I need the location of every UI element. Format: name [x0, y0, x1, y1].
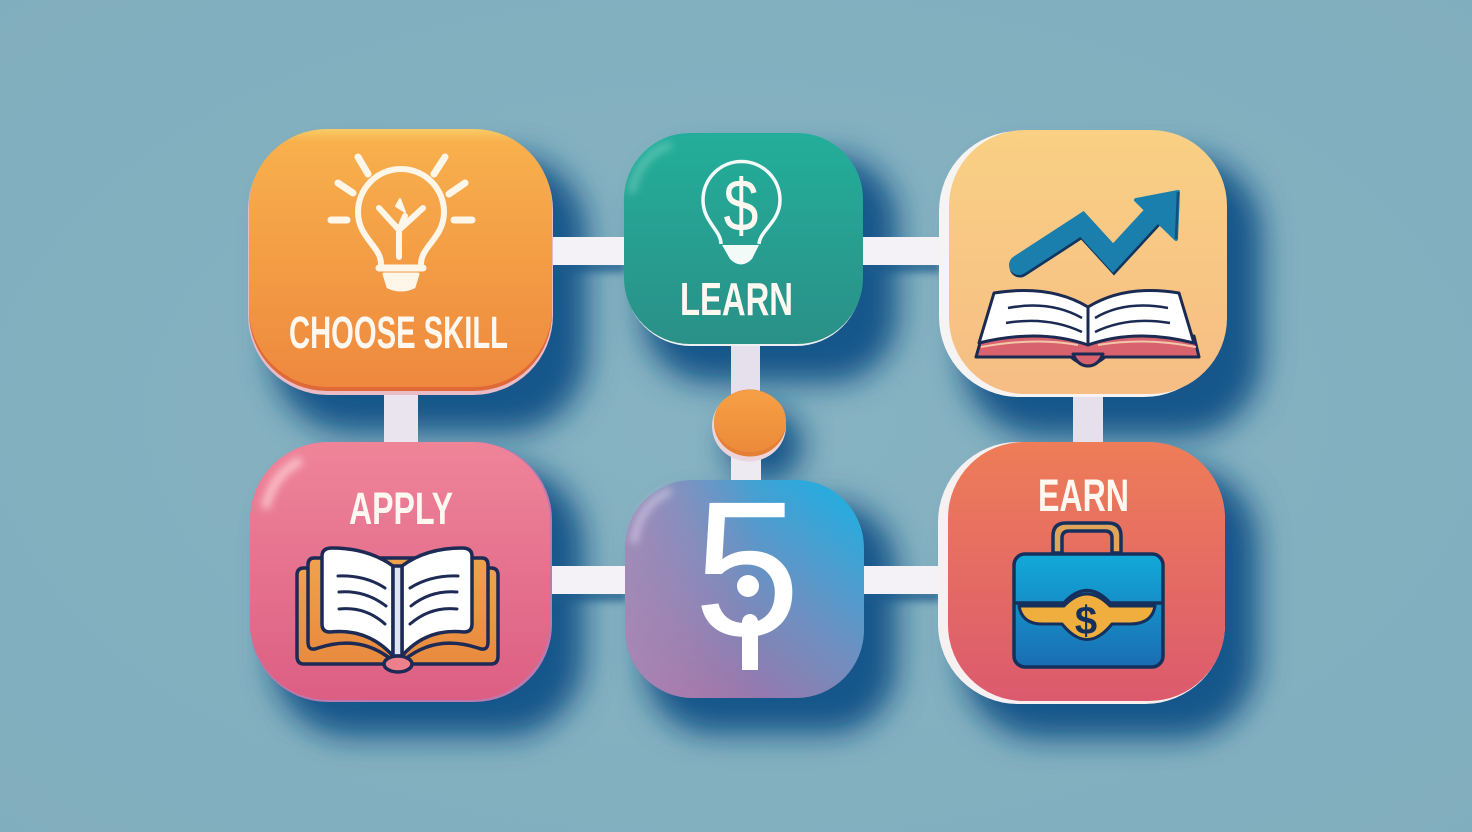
- panel: step five: [625, 461, 864, 698]
- icon: rising arrow: [1019, 192, 1178, 267]
- connector: choose skill to learn: [550, 237, 626, 265]
- panel: earn: [938, 442, 1225, 704]
- panel: career growth: [939, 130, 1227, 397]
- dollar badge: $: [1075, 599, 1097, 643]
- label: learn: LEARN: [680, 273, 793, 325]
- label: earn: EARN: [1038, 470, 1129, 521]
- dollar sign: $: [724, 164, 758, 247]
- panel: apply: [250, 442, 552, 702]
- icon: open book with orange cover: [297, 548, 498, 672]
- connector: growth to earn: [1073, 394, 1103, 444]
- connector: learn to centre dot: [731, 343, 760, 397]
- centre dot node: [712, 390, 786, 462]
- connector: learn to growth: [861, 237, 941, 265]
- connector: five to earn: [861, 566, 941, 594]
- connectors: [384, 237, 1103, 601]
- label: choose skill: CHOOSE SKILL: [289, 307, 508, 358]
- card shadows: [272, 155, 1262, 739]
- icon: briefcase: [1014, 523, 1163, 667]
- icon: dot and stem: [737, 575, 759, 670]
- icon: light bulb: [331, 157, 472, 290]
- connector: choose skill to apply: [384, 390, 418, 444]
- connector shadows: [551, 262, 941, 601]
- panel: learn: [624, 133, 863, 346]
- icon: open book: [976, 290, 1199, 366]
- icon: bulb with dollar: [703, 162, 780, 264]
- panel: choose skill: [248, 129, 553, 395]
- label: apply: APPLY: [349, 483, 453, 534]
- connector: centre dot to five: [731, 452, 761, 482]
- connector: apply to five: [549, 566, 627, 594]
- number: five: 5: [694, 461, 800, 676]
